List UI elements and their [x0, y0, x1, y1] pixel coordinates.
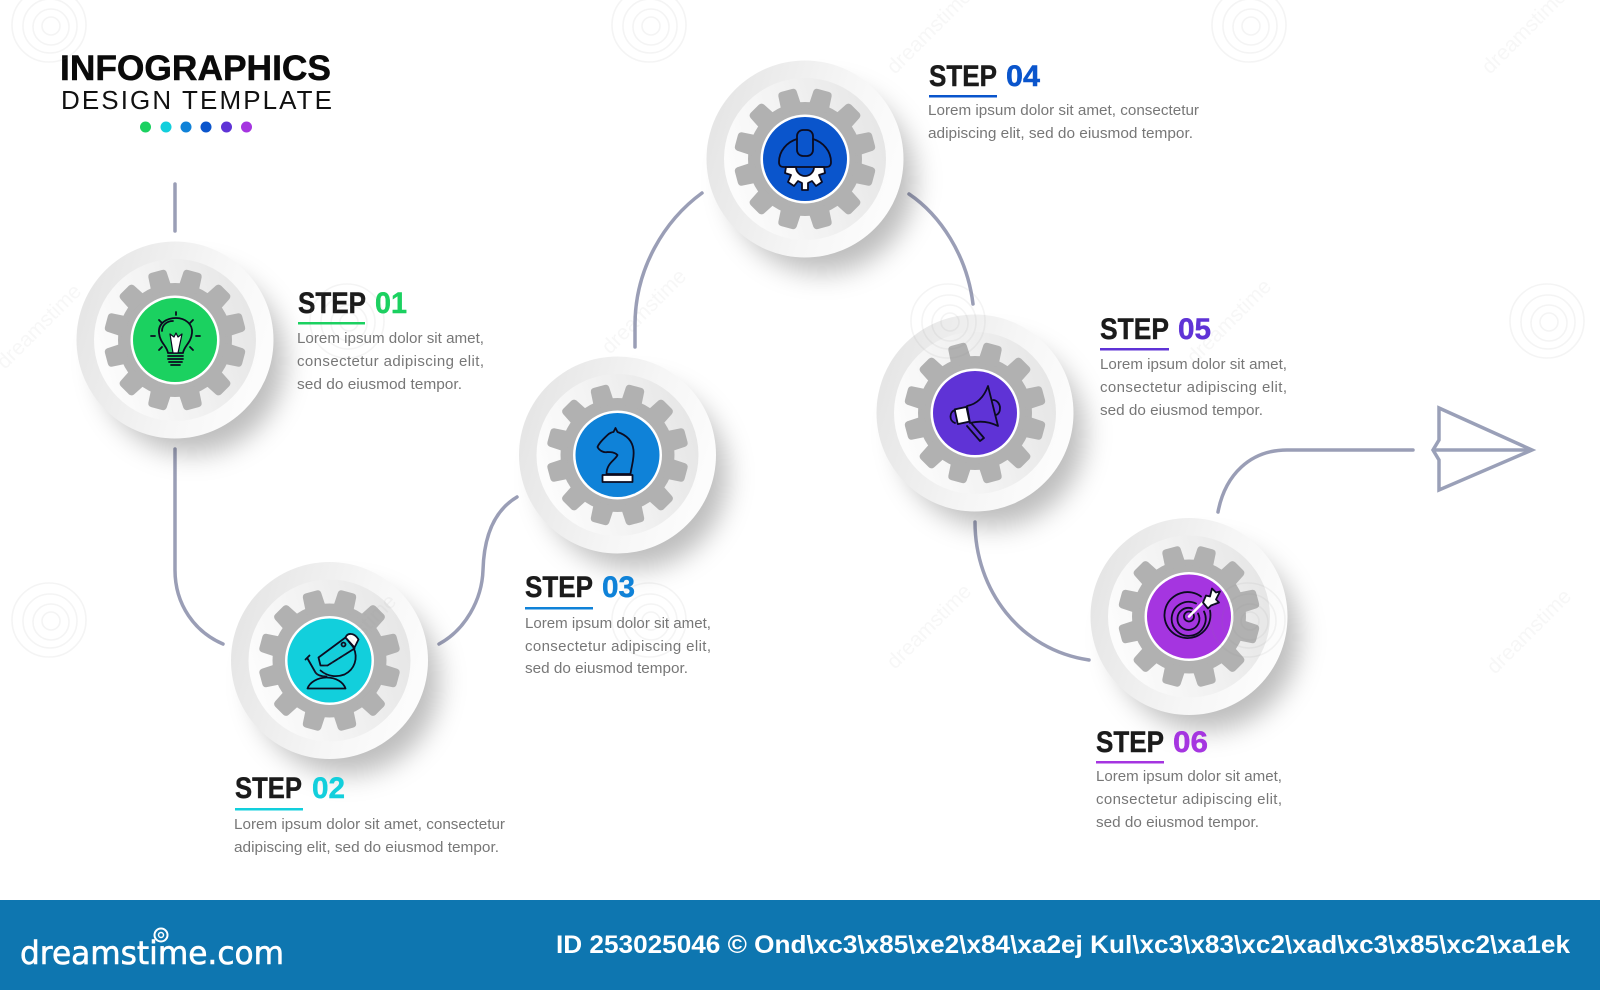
- icon: light bulb: [151, 312, 200, 365]
- step 06 text: consectetur adipiscing elit,: [1096, 791, 1282, 808]
- step 06 node: [1090, 518, 1299, 730]
- step 02 text: 02: [312, 772, 345, 805]
- step 06 text: STEP: [1096, 726, 1164, 759]
- icon: hard hat with gear: [779, 130, 831, 190]
- step 01 text: consectetur adipiscing elit,: [297, 353, 484, 370]
- step 06 text: Lorem ipsum dolor sit amet,: [1096, 768, 1282, 785]
- step 01 text: Lorem ipsum dolor sit amet,: [297, 330, 484, 347]
- step 03 text: sed do eiusmod tempor.: [525, 660, 688, 677]
- title: [60, 49, 332, 115]
- step 04 text: STEP: [929, 60, 997, 93]
- footer logo: dreamstime.com: [20, 934, 284, 972]
- step 01 text: sed do eiusmod tempor.: [297, 376, 462, 393]
- footer bar: [0, 900, 1600, 990]
- step 01 text: 01: [375, 287, 407, 320]
- step 05 text: consectetur adipiscing elit,: [1100, 379, 1287, 396]
- title colour dots: [140, 122, 252, 132]
- step 04 node: [706, 60, 915, 273]
- step 03 text: [525, 571, 711, 677]
- step 05 node: [876, 314, 1085, 527]
- step 06 text: 06: [1173, 726, 1208, 759]
- icon: target with dart: [1164, 588, 1220, 638]
- watermark overlay: dreamstime: [1182, 275, 1276, 369]
- step 01 text: STEP: [298, 287, 366, 320]
- footer credit: ID 253025046 © Ond\xc3\x85\xe2\x84\xa2ej Kul\xc3\x83\xc2\xad\xc3\x85\xc2\xa1ek: [556, 931, 1570, 959]
- icon: microscope: [306, 634, 358, 688]
- watermark overlay: dreamstime: [1482, 585, 1576, 679]
- step 04 text: 04: [1006, 60, 1040, 93]
- step 02 text: Lorem ipsum dolor sit amet, consectetur: [234, 816, 505, 833]
- watermark overlay: [0, 0, 1584, 684]
- step 02 text: STEP: [235, 772, 302, 805]
- step 01 node: [76, 242, 285, 454]
- step 05 text: [1100, 313, 1287, 419]
- icon: chess knight: [598, 428, 634, 482]
- step 04 text: [928, 60, 1199, 142]
- step 04 text: adipiscing elit, sed do eiusmod tempor.: [928, 125, 1193, 142]
- step 03 text: STEP: [525, 571, 593, 604]
- icon: megaphone: [950, 386, 1000, 441]
- watermark overlay: dreamstime: [307, 590, 401, 684]
- step 04 text: Lorem ipsum dolor sit amet, consectetur: [928, 102, 1199, 119]
- step 06 text: [1096, 726, 1282, 831]
- step 03 node: [519, 356, 728, 569]
- step 03 text: 03: [602, 571, 635, 604]
- step 05 text: 05: [1178, 313, 1211, 346]
- step 02 text: [234, 772, 505, 856]
- icon: paper plane arrow: [1433, 408, 1532, 490]
- step 05 text: STEP: [1100, 313, 1169, 346]
- step 03 text: consectetur adipiscing elit,: [525, 638, 711, 655]
- connector lines: [175, 184, 1413, 660]
- title: INFOGRAPHICS: [60, 49, 331, 88]
- step 02 node: [231, 562, 440, 774]
- step 03 text: Lorem ipsum dolor sit amet,: [525, 615, 711, 632]
- step 05 text: Lorem ipsum dolor sit amet,: [1100, 356, 1287, 373]
- watermark overlay: dreamstime: [597, 265, 691, 359]
- title: DESIGN TEMPLATE: [61, 85, 332, 115]
- step 06 text: sed do eiusmod tempor.: [1096, 814, 1259, 831]
- step 05 text: sed do eiusmod tempor.: [1100, 402, 1263, 419]
- step 02 text: adipiscing elit, sed do eiusmod tempor.: [234, 839, 499, 856]
- watermark overlay: dreamstime: [882, 580, 976, 674]
- step 01 text: [297, 287, 484, 393]
